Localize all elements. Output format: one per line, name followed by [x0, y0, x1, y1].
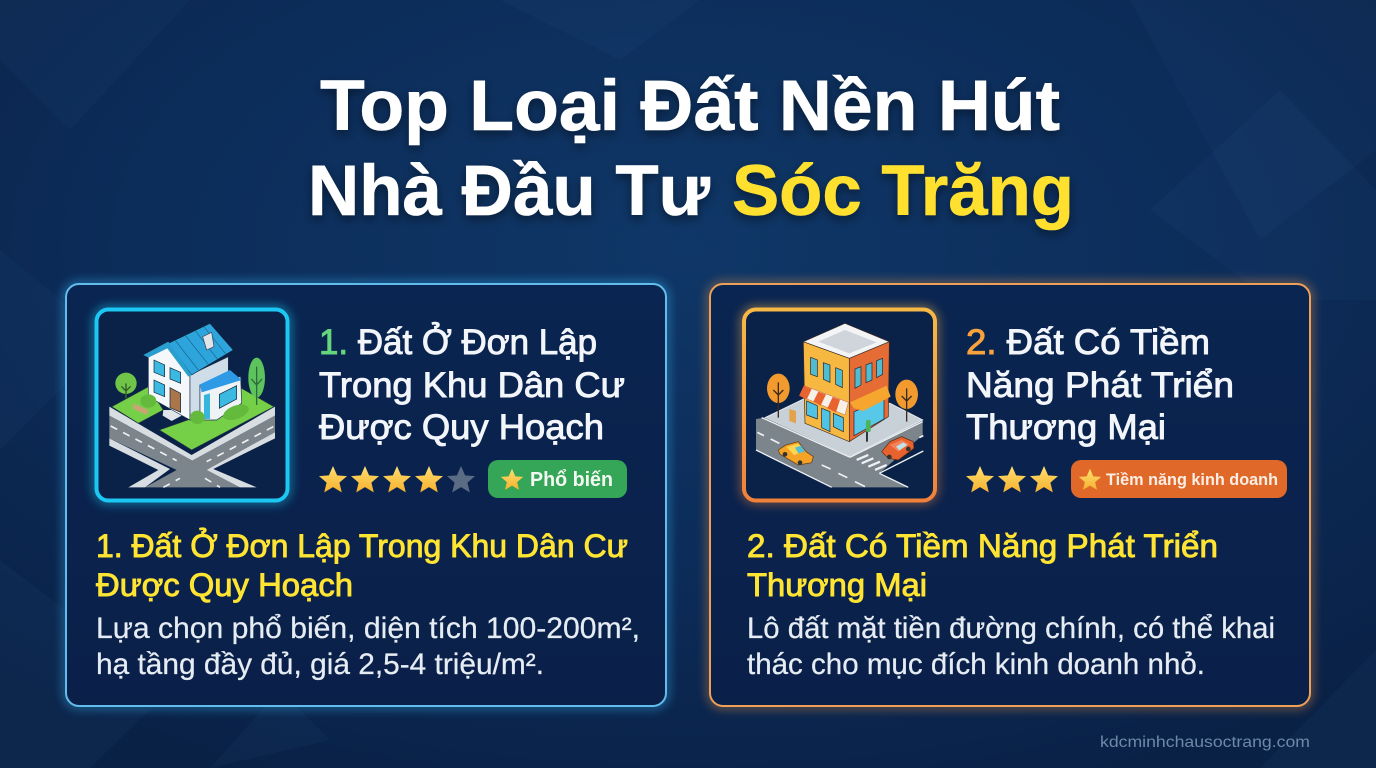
subheading: card 1: Được Quy Hoạch: [96, 567, 353, 603]
subheading: card 1: 1. Đất Ở Đơn Lập Trong Khu Dân Cư: [96, 527, 628, 564]
text: card 2 description: Lô đất mặt tiền đường chính, có thể khai: [747, 612, 1275, 645]
text: card 1 description: [96, 612, 640, 681]
subheading: card 2: Thương Mại: [747, 567, 927, 603]
text: card 2 description: [747, 612, 1275, 681]
panel: card 2 commercial land: [710, 284, 1310, 706]
title: [308, 67, 1074, 231]
title: Top Loại Đất Nền Hút: [320, 67, 1060, 146]
heading: card 1 title block: Được Quy Hoạch: [319, 408, 604, 447]
heading: card 1 title block: [319, 322, 625, 447]
text: card 2 description: thác cho mục đích kinh doanh nhỏ.: [747, 648, 1205, 681]
subheading: card 1: [96, 527, 628, 603]
badge: business potential: [1071, 460, 1287, 498]
subheading: card 2: [747, 528, 1218, 603]
panel: card 1 residential land: [66, 284, 666, 706]
footer: website: kdcminhchausoctrang.com: [1100, 734, 1310, 751]
rating: four of five stars: [319, 466, 475, 492]
badge: business potential: Tiềm năng kinh doanh: [1106, 470, 1278, 489]
badge: popular: [488, 460, 627, 498]
text: card 1 description: hạ tầng đầy đủ, giá 2,5-4 triệu/m².: [96, 648, 544, 681]
rating: three stars: [966, 466, 1058, 492]
title: Sóc Trăng: [732, 152, 1074, 231]
icon: isometric house: [96, 310, 288, 500]
heading: card 2 title block: Thương Mại: [966, 408, 1166, 447]
heading: card 2 title block: [966, 323, 1234, 447]
text: card 1 description: Lựa chọn phổ biến, diện tích 100-200m²,: [96, 612, 640, 645]
icon: isometric shop: [744, 310, 935, 500]
subheading: card 2: 2. Đất Có Tiềm Năng Phát Triển: [747, 528, 1218, 564]
heading: card 1 title block: 1. Đất Ở Đơn Lập: [319, 322, 597, 362]
badge: popular: Phổ biến: [530, 469, 613, 491]
heading: card 2 title block: 2. Đất Có Tiềm: [966, 323, 1210, 362]
title: Nhà Đầu Tư: [308, 152, 711, 231]
heading: card 2 title block: Năng Phát Triển: [966, 366, 1234, 405]
heading: card 1 title block: Trong Khu Dân Cư: [319, 366, 625, 405]
